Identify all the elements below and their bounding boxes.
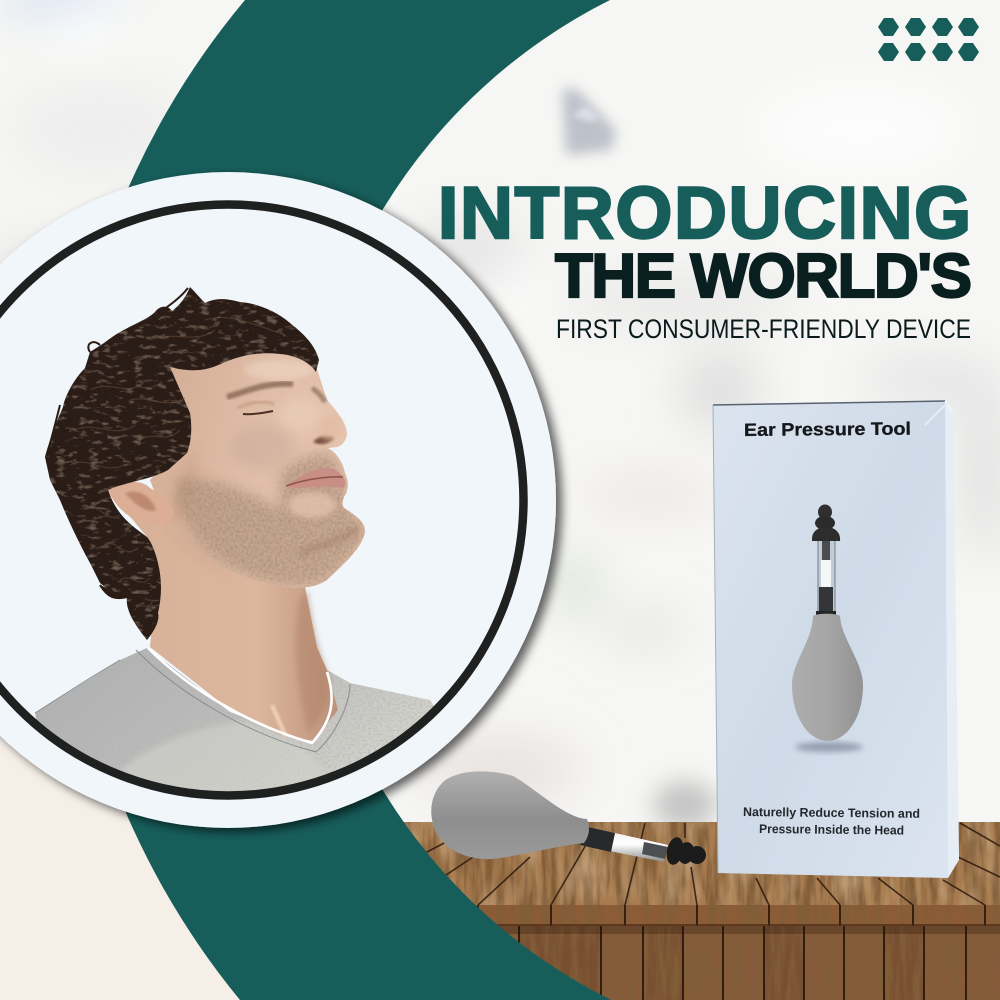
table front edge	[468, 905, 1000, 926]
table lower planks	[490, 926, 1000, 1000]
product box	[713, 401, 959, 878]
box tagline: Naturelly Reduce Tension and	[743, 805, 920, 821]
table top surface	[400, 822, 1000, 906]
white disc	[0, 172, 556, 828]
rubber bulb	[431, 771, 589, 859]
heading line: the world's: THE WORLD'S	[555, 242, 972, 311]
box side panel	[940, 401, 959, 878]
blurred blue-grey shape	[562, 88, 616, 155]
box tagline second line: Pressure Inside the Head	[759, 822, 904, 838]
product shadow	[795, 742, 863, 752]
product on box	[792, 504, 863, 741]
man breathing with eyes closed	[34, 287, 434, 792]
box front face	[713, 401, 948, 878]
clear rod	[580, 826, 668, 862]
beard stubble	[176, 454, 365, 586]
green curved band	[62, 0, 611, 1000]
dark curly hair	[45, 287, 319, 640]
heading line: introducing: INTRODUCING	[438, 173, 971, 254]
box title: Ear Pressure Tool	[744, 419, 911, 440]
hexagon decoration	[878, 18, 979, 61]
loose ear pressure tool on table	[431, 771, 708, 866]
grey t-shirt	[34, 648, 434, 792]
ear tip	[664, 836, 708, 866]
ear	[107, 482, 174, 525]
heading	[438, 173, 972, 344]
white collar trim	[148, 648, 332, 743]
circular portrait panel	[0, 172, 556, 830]
neck	[130, 516, 338, 741]
table	[400, 822, 1000, 1000]
face	[150, 345, 365, 588]
nose, lips and closed eye	[227, 384, 346, 488]
black ring	[0, 204, 524, 796]
